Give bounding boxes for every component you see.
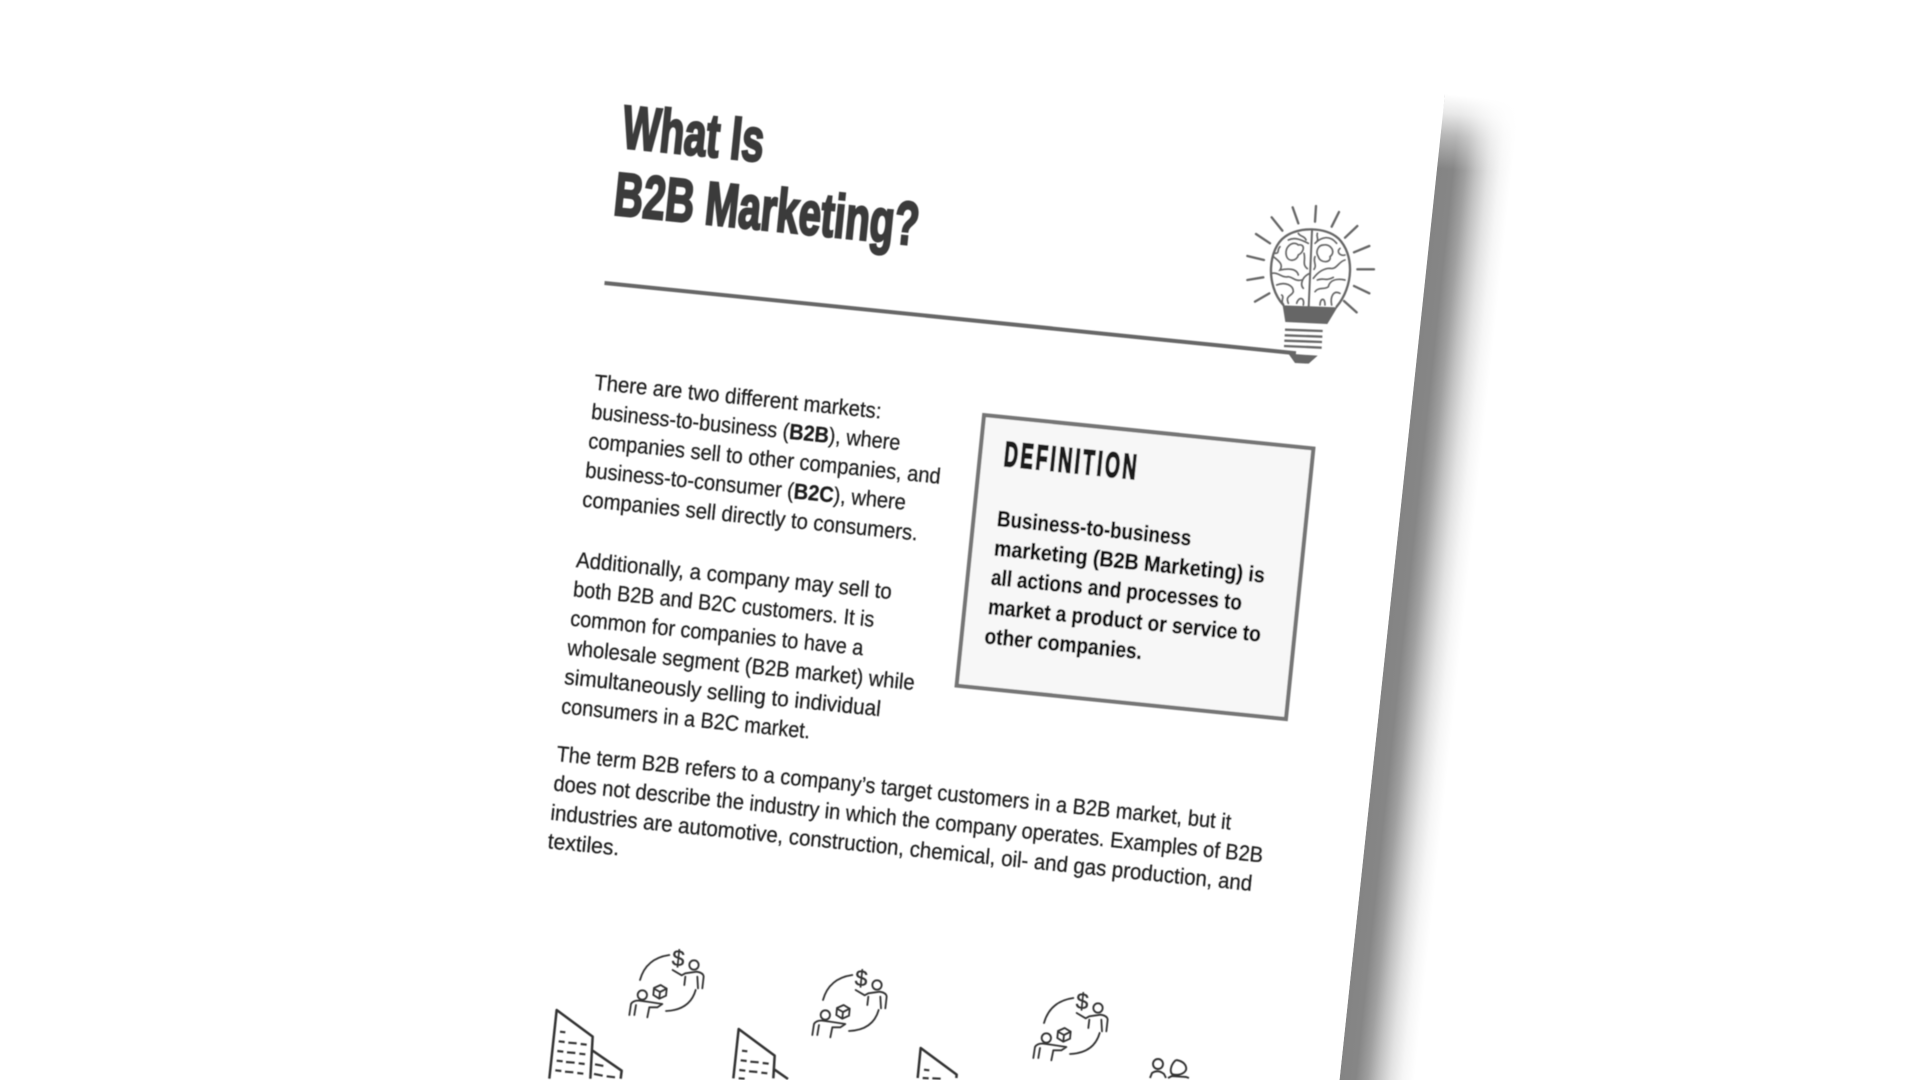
page sheet [336,0,1445,1080]
text block: selling to both [559,547,925,754]
text block: two markets: business-to-consumer (B2C), where [584,457,907,515]
icon: exchange 1 [629,944,704,1017]
text block: two markets: companies sell to other companies, and [587,428,942,489]
title rule [604,283,1296,353]
definition box [957,415,1313,719]
text block: selling to both: Additionally, a company may sell to [575,547,893,604]
page shadow [1340,94,1522,1080]
icon: buildings 3 [918,1048,957,1079]
text block: selling to both: simultaneously selling to individual [563,664,882,721]
text block: selling to both: consumers in a B2C market. [560,693,812,744]
definition text [984,506,1271,676]
text block: term B2B: The term B2B refers to a company’s target customers in a B2B market, but it [555,741,1232,835]
definition heading: DEFINITION [1002,435,1141,487]
text block: two markets [581,370,948,547]
definition text: market a product or service to [987,594,1262,647]
icon: people [1150,1059,1189,1078]
text block: two markets: business-to-business (B2B), where [590,399,902,455]
icon: exchange 3 [1033,987,1108,1060]
title: B2B Marketing? [611,160,922,258]
icon: exchange 2 [812,964,887,1037]
title [611,93,929,258]
definition text: Business-to-business [996,506,1192,551]
definition text: marketing (B2B Marketing) is [993,535,1266,588]
definition text: other companies. [984,623,1143,664]
definition text: all actions and processes to [990,565,1243,615]
text block: term B2B: textiles. [547,828,621,860]
text block: term B2B: industries are automotive, construction, chemical, oil- and gas production, and [549,800,1253,896]
icon: buildings 2 [733,1029,788,1079]
icon: buildings 1 [549,1010,622,1079]
text block: term B2B [547,741,1267,925]
text block: selling to both: wholesale segment (B2B market) while [565,635,916,695]
text block: selling to both: common for companies to have a [569,606,865,660]
text block: two markets: companies sell directly to consumers. [581,487,919,545]
text block: selling to both: both B2B and B2C customers. It is [572,576,876,632]
title: What Is [619,93,768,175]
text block: two markets: There are two different markets: [593,370,883,424]
icon: brain light bulb [1247,206,1374,364]
panel: definition [957,415,1313,719]
text block: term B2B: does not describe the industry in which the company operates. Examples of B2B [552,770,1264,867]
